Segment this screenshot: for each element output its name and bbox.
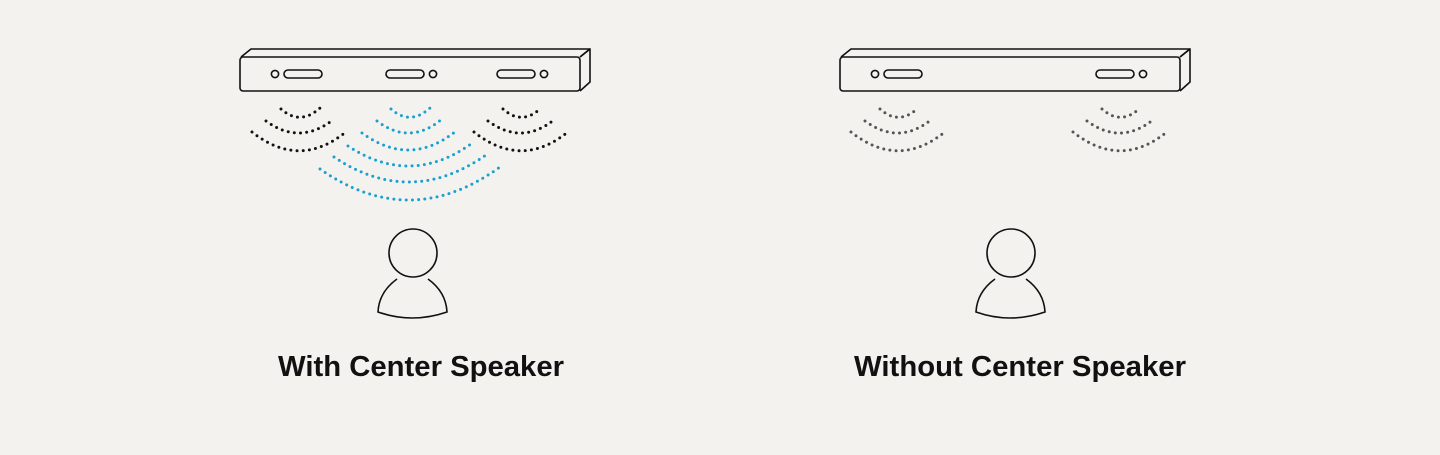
label: with center speaker: With Center Speaker <box>278 351 564 383</box>
sound waves: center (blue) <box>320 108 500 200</box>
soundbar without center speaker <box>840 49 1190 91</box>
sound waves: right (black) <box>474 108 569 151</box>
icon: listener <box>976 229 1045 318</box>
icon: listener <box>378 229 447 318</box>
sound waves: left (black) <box>252 108 347 151</box>
sound waves: left (grey) <box>851 108 946 151</box>
sound waves: right (grey) <box>1073 108 1168 151</box>
panel: with center speaker <box>240 49 590 383</box>
soundbar with center speaker <box>240 49 590 91</box>
panel: without center speaker <box>840 49 1190 383</box>
label: without center speaker: Without Center Speaker <box>854 351 1186 383</box>
